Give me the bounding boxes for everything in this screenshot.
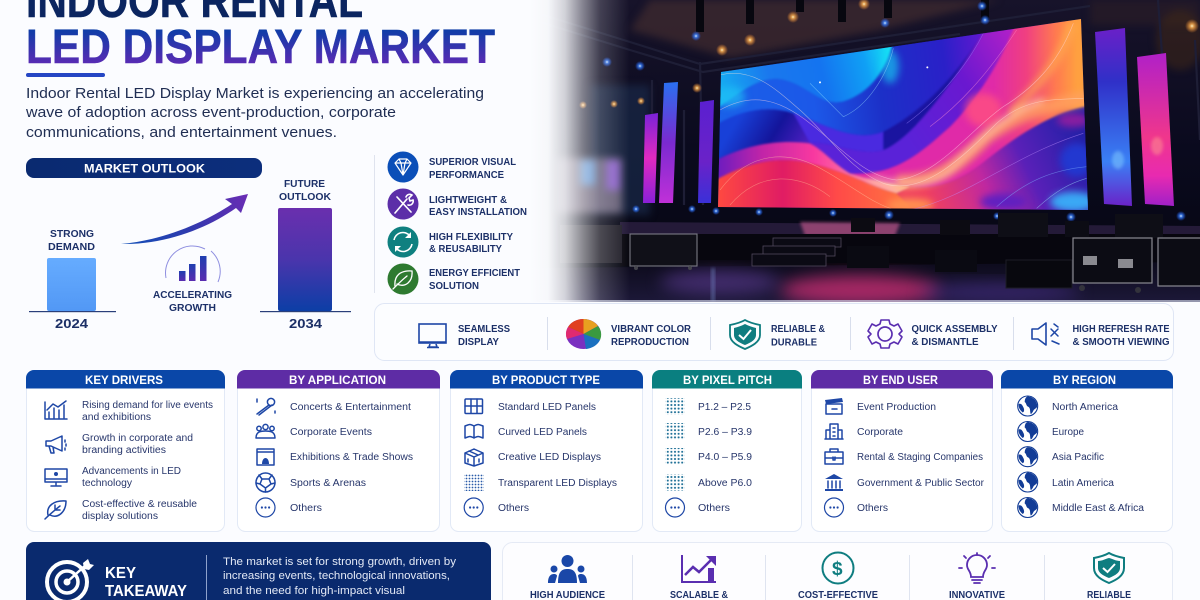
- pitch: P1.2 to P2.5: P1.2 – P2.5: [698, 402, 751, 413]
- highlight: high audience: [530, 555, 605, 600]
- application: sports: [256, 473, 366, 492]
- product: creative displays: Creative LED Displays: [498, 452, 601, 463]
- benefit: lightweight and easy installation: [388, 188, 527, 220]
- key drivers header: [26, 370, 225, 388]
- feature: quick assembly and dismantle: QUICK ASSEMBLY: [912, 324, 998, 335]
- benefit: lightweight and easy installation: EASY INSTALLATION: [429, 207, 527, 218]
- intro paragraph: [25, 86, 484, 141]
- feature: high refresh rate: HIGH REFRESH RATE: [1072, 324, 1170, 335]
- benefit: energy efficient solution: [388, 264, 520, 294]
- benefit: high flexibility and reusability: HIGH FLEXIBILITY: [429, 232, 513, 243]
- end user: government: [825, 474, 985, 491]
- product: others: Others: [498, 503, 529, 514]
- market outlook heading: MARKET OUTLOOK: [84, 162, 205, 176]
- driver: LED technology: Advancements in LED: [82, 466, 181, 477]
- product: standard panels: [465, 399, 596, 414]
- key takeaway label: TAKEAWAY: [105, 583, 187, 600]
- region: middle east and africa: [1018, 498, 1144, 518]
- feature: reliable and durable: DURABLE: [771, 338, 817, 348]
- by end user header: BY END USER: [863, 373, 938, 387]
- panel: feature strip: [374, 304, 1174, 360]
- region: latin america: [1018, 472, 1114, 492]
- end user: rental and staging: Rental & Staging Companies: [857, 452, 983, 463]
- left white fade: [530, 0, 630, 302]
- by pixel pitch header: [652, 370, 802, 388]
- pitch: above P6.0: [665, 474, 752, 491]
- feature: reliable and durable: [730, 320, 825, 349]
- highlight: innovative: [949, 553, 1005, 600]
- pitch: P1.2 to P2.5: [665, 398, 751, 415]
- accelerating growth icon: GROWTH: [169, 303, 216, 314]
- product: standard panels: Standard LED Panels: [498, 402, 596, 413]
- by region header: BY REGION: [1053, 373, 1116, 387]
- pitch: others: Others: [698, 503, 730, 514]
- feature: seamless display: DISPLAY: [458, 337, 499, 348]
- intro paragraph: wave of adoption across event-production, corporate: [25, 105, 396, 121]
- market outlook heading: [26, 158, 262, 178]
- bar 2034 future outlook: OUTLOOK: [279, 192, 332, 203]
- benefit: superior visual performance: SUPERIOR VISUAL: [429, 157, 516, 168]
- panel: by product type: [450, 370, 643, 532]
- product: creative displays: [465, 449, 601, 466]
- end user: corporate: [825, 424, 903, 439]
- feature: seamless display: SEAMLESS: [458, 324, 510, 335]
- feature: high refresh rate: & SMOOTH VIEWING: [1072, 337, 1170, 348]
- panel: market outlook: [26, 158, 351, 331]
- application: corporate events: Corporate Events: [290, 427, 372, 438]
- product: curved panels: Curved LED Panels: [498, 427, 587, 438]
- feature: vibrant color reproduction: VIBRANT COLOR: [611, 324, 692, 335]
- feature: quick assembly and dismantle: [868, 320, 998, 348]
- driver: LED technology: [45, 466, 181, 489]
- key takeaway text: [223, 556, 457, 597]
- bar 2024 strong demand: STRONG: [50, 229, 94, 240]
- by pixel pitch header: BY PIXEL PITCH: [683, 373, 772, 387]
- panel: key takeaway: [26, 542, 491, 600]
- end user: rental and staging: [825, 449, 983, 464]
- bar 2034 future outlook: FUTURE: [284, 179, 325, 190]
- bar 2024 strong demand: [29, 229, 116, 331]
- by product type header: BY PRODUCT TYPE: [492, 373, 600, 387]
- benefit: energy efficient solution: SOLUTION: [429, 281, 479, 292]
- key takeaway text: and the need for high-impact visual: [223, 585, 405, 597]
- application: corporate events: [256, 424, 372, 438]
- application: others: Others: [290, 503, 322, 514]
- driver: LED technology: technology: [82, 478, 132, 489]
- application: concerts: [257, 398, 411, 415]
- intro paragraph: communications, and entertainment venues.: [26, 125, 337, 141]
- end user: others: [824, 498, 888, 517]
- trusses: [540, 0, 1200, 205]
- region: europe: [1018, 422, 1084, 442]
- feature: vibrant color reproduction: [566, 319, 692, 349]
- panel: by pixel pitch: [652, 370, 802, 532]
- application: others: [256, 498, 322, 517]
- driver: live events demand: and exhibitions: [82, 412, 151, 423]
- key drivers header: KEY DRIVERS: [85, 373, 163, 387]
- feature: vibrant color reproduction: REPRODUCTION: [611, 337, 689, 348]
- pitch: P4.0 to P5.9: P4.0 – P5.9: [698, 452, 752, 463]
- benefit: superior visual performance: PERFORMANCE: [429, 170, 504, 181]
- driver: cost-effective reusable: [45, 499, 197, 522]
- pitch: P2.6 to P3.9: [665, 423, 752, 440]
- driver: corporate and branding growth: [46, 433, 193, 456]
- main LED screen art: [710, 10, 1100, 220]
- application: exhibitions: [257, 449, 413, 465]
- by end user header: [811, 370, 993, 388]
- product: transparent displays: [464, 474, 617, 491]
- ceiling glow: [556, 0, 1200, 215]
- highlight: cost-effective: [798, 552, 878, 600]
- driver: live events demand: [45, 400, 213, 423]
- key takeaway label: [105, 565, 187, 600]
- icon: target with arrow: [47, 559, 94, 600]
- intro paragraph: Indoor Rental LED Display Market is experiencing an accelerating: [26, 86, 484, 102]
- highlight: cost-effective: $: [832, 559, 843, 580]
- by application header: BY APPLICATION: [289, 373, 386, 387]
- driver: cost-effective reusable: Cost-effective & reusable: [82, 499, 197, 510]
- title: LED DISPLAY MARKET: [26, 21, 495, 74]
- panel: key drivers: [26, 370, 225, 532]
- photo: LED stage with large display: [530, 0, 1200, 305]
- title underline: [26, 73, 105, 77]
- stage lights: [579, 0, 1199, 222]
- by product type header: [450, 370, 643, 388]
- benefit: lightweight and easy installation: LIGHTWEIGHT &: [429, 195, 507, 206]
- panel: value highlights: [502, 542, 1172, 600]
- product: curved panels: [465, 424, 587, 438]
- region: latin america: Latin America: [1052, 478, 1114, 489]
- benefit: superior visual performance: [388, 152, 516, 182]
- driver: corporate and branding growth: branding activities: [82, 445, 166, 456]
- end user: corporate: Corporate: [857, 427, 903, 438]
- bar 2034 future outlook: 2034: [289, 317, 322, 331]
- driver: corporate and branding growth: Growth in corporate and: [82, 433, 193, 444]
- bar 2024 strong demand: 2024: [55, 317, 88, 331]
- key takeaway text: The market is set for strong growth, driven by: [223, 556, 457, 568]
- highlight: reliable: [1087, 553, 1131, 600]
- feature: reliable and durable: RELIABLE &: [771, 324, 825, 335]
- pitch: P4.0 to P5.9: [665, 448, 752, 465]
- pitch: P2.6 to P3.9: P2.6 – P3.9: [698, 427, 752, 438]
- end user: others: Others: [857, 503, 888, 514]
- region: middle east and africa: Middle East & Africa: [1052, 503, 1144, 514]
- benefit: high flexibility and reusability: & REUSABILITY: [429, 244, 502, 255]
- pitch: above P6.0: Above P6.0: [698, 478, 752, 489]
- driver: live events demand: Rising demand for live events: [82, 400, 213, 411]
- speakers and crates: [560, 213, 1200, 293]
- key takeaway text: increasing events, technological innovations,: [223, 570, 450, 582]
- region: north america: [1018, 396, 1118, 416]
- product: others: [464, 498, 529, 517]
- end user: event production: Event Production: [857, 402, 936, 413]
- driver: cost-effective reusable: display solutions: [82, 511, 158, 522]
- product: transparent displays: Transparent LED Displays: [498, 478, 617, 489]
- key takeaway label: KEY: [105, 565, 136, 582]
- application: concerts: Concerts & Entertainment: [290, 402, 411, 413]
- by region header: [1001, 370, 1173, 388]
- steps: [752, 238, 841, 266]
- bar 2034 future outlook: [260, 179, 351, 331]
- region: asia pacific: Asia Pacific: [1052, 452, 1104, 463]
- benefit: high flexibility and reusability: [388, 226, 513, 258]
- feature: quick assembly and dismantle: & DISMANTLE: [912, 337, 979, 348]
- side panels: [643, 28, 1174, 206]
- benefit: energy efficient solution: ENERGY EFFICIENT: [429, 268, 520, 279]
- growth arrow: [121, 194, 248, 244]
- title: [26, 0, 495, 74]
- highlight: scalable: [670, 555, 728, 600]
- feature: high refresh rate: [1032, 323, 1170, 348]
- application: sports: Sports & Arenas: [290, 478, 366, 489]
- region: asia pacific: [1018, 447, 1104, 467]
- region: north america: North America: [1052, 402, 1118, 413]
- panel: by region: [1001, 370, 1173, 532]
- panel: by application: [237, 370, 440, 532]
- feature: seamless display: [419, 324, 510, 348]
- end user: government: Government & Public Sector: [857, 478, 985, 489]
- end user: event production: [825, 398, 936, 414]
- accelerating growth icon: [153, 246, 232, 314]
- by application header: [237, 370, 440, 388]
- panel: by end user: [811, 370, 993, 532]
- application: exhibitions: Exhibitions & Trade Shows: [290, 452, 413, 463]
- stage deck: [530, 222, 1200, 305]
- panel: benefits list: [374, 152, 527, 294]
- region: europe: Europe: [1052, 427, 1084, 438]
- accelerating growth icon: ACCELERATING: [153, 290, 232, 301]
- pitch: others: [666, 498, 730, 517]
- bar 2024 strong demand: DEMAND: [48, 242, 95, 253]
